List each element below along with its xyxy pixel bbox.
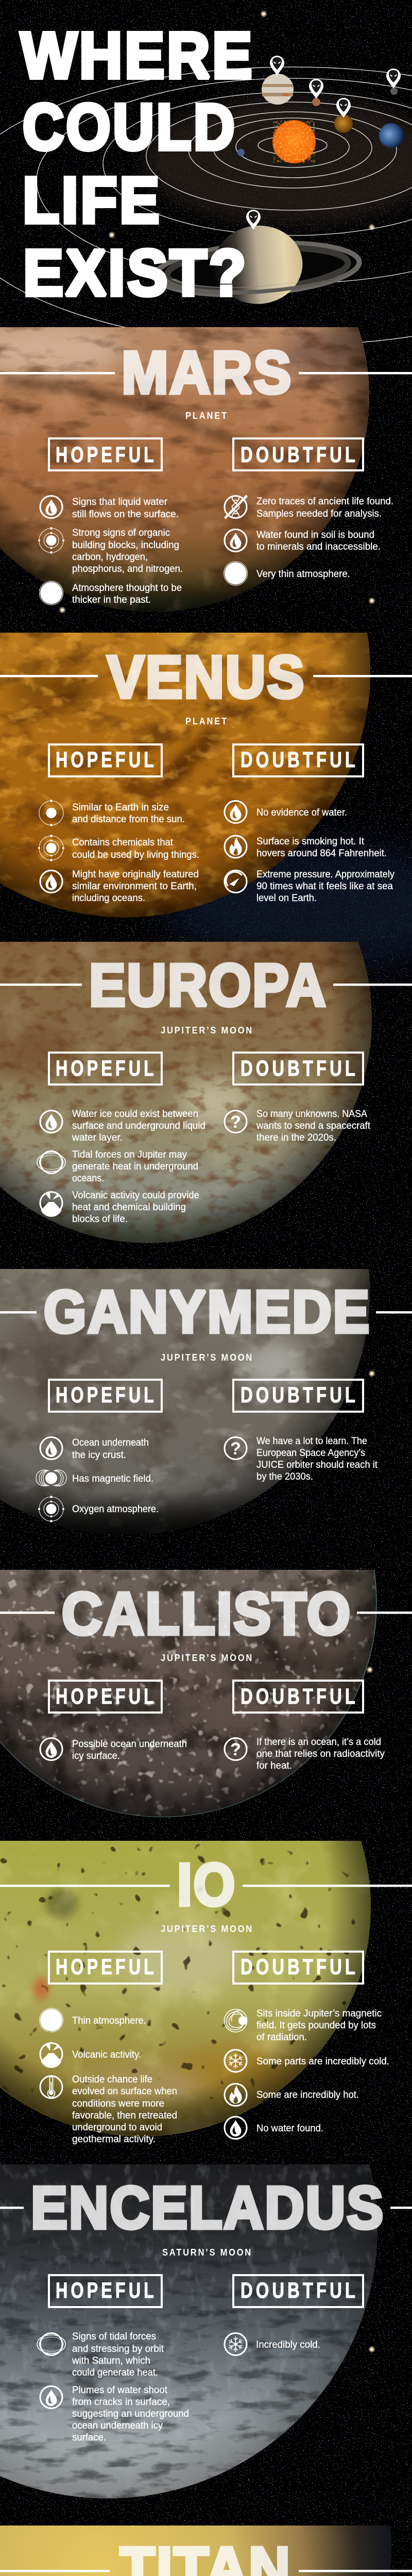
item: hot parts	[225, 2083, 359, 2106]
small rocky planet: mars	[312, 98, 320, 106]
label: type: JUPITER’S MOON	[161, 1352, 253, 1363]
venus	[334, 114, 353, 133]
item: water ice	[40, 1109, 205, 1143]
orbits	[0, 67, 412, 345]
item: outside chance: underground to avoid	[72, 2122, 162, 2133]
panel: Io	[0, 1677, 412, 2145]
item: water ice: Water ice could exist between	[72, 1109, 198, 1120]
item: incredibly cold	[225, 2333, 320, 2355]
label: type: PLANET	[185, 716, 228, 726]
heading rules	[0, 675, 412, 677]
hopeful box: HOPEFUL	[56, 1955, 157, 1979]
item: a lot to learn: by the 2030s.	[256, 1471, 313, 1482]
item: water in soil: Water found in soil is bound	[256, 530, 374, 540]
doubtful box	[233, 2275, 363, 2307]
panel: Titan	[0, 2526, 412, 2576]
item: unknowns: So many unknowns. NASA	[256, 1109, 367, 1120]
heading: ENCELADUS	[31, 2174, 385, 2241]
item: volcanic activity: Volcanic activity could provide	[72, 1190, 199, 1201]
item: a lot to learn	[225, 1436, 378, 1482]
doubtful box	[233, 1380, 363, 1412]
panel: Venus	[0, 633, 412, 917]
item: volcanic activity: blocks of life.	[72, 1214, 128, 1225]
heading rules	[0, 1311, 412, 1314]
doubtful box	[233, 744, 363, 776]
item: unknowns: there in the 2020s.	[256, 1132, 336, 1143]
doubtful box: DOUBTFUL	[241, 1056, 358, 1081]
item: possible ocean: icy surface.	[72, 1751, 120, 1761]
small moon	[390, 88, 398, 95]
hopeful box	[49, 744, 162, 776]
hopeful box: HOPEFUL	[56, 2278, 157, 2303]
doubtful box: DOUBTFUL	[241, 1955, 358, 1979]
item: no ancient life: Zero traces of ancient life found.	[256, 496, 393, 507]
item: a lot to learn: JUICE orbiter should reach it	[256, 1460, 378, 1470]
item: thin atmosphere	[224, 562, 350, 585]
heading rules	[0, 984, 412, 986]
item: organic building blocks: phosphorus, and nitrogen.	[72, 564, 183, 574]
item: cold ocean: one that relies on radioactivity	[256, 1749, 385, 1759]
item: unknowns: ?	[230, 1112, 241, 1132]
saturn	[150, 218, 364, 311]
planet: Titan atmosphere	[0, 2526, 397, 2576]
item: chemicals: could be used by living things.	[72, 850, 199, 860]
title: LIFE	[23, 164, 162, 236]
item: thin atmosphere: Very thin atmosphere.	[256, 569, 350, 580]
heading: CALLISTO	[62, 1580, 352, 1647]
label: type: JUPITER’S MOON	[161, 1924, 253, 1934]
location pins with alien heads	[246, 56, 401, 230]
item: water ice: surface and underground liquid	[72, 1121, 205, 1131]
item: cold parts: Some parts are incredibly cold.	[256, 2056, 389, 2067]
item: magnetic field	[36, 1470, 153, 1486]
hopeful box: HOPEFUL	[56, 1056, 157, 1081]
label: type: JUPITER’S MOON	[161, 1653, 253, 1663]
panel: Europa	[0, 942, 412, 1243]
item: liquid water: Signs that liquid water	[72, 497, 168, 507]
doubtful box: DOUBTFUL	[241, 1684, 358, 1709]
item: no ancient life: Samples needed for analysis.	[256, 509, 382, 519]
item: similar to Earth: Similar to Earth in size	[72, 802, 169, 813]
title: WHERE	[21, 19, 254, 92]
item: tidal forces: Signs of tidal forces	[72, 2331, 156, 2342]
item: atmosphere past: thicker in the past.	[72, 595, 151, 605]
item: outside chance: conditions were more	[72, 2098, 164, 2109]
item: extreme pressure: Extreme pressure. Approximately	[256, 869, 394, 880]
doubtful box	[233, 1053, 363, 1084]
heading: IO	[177, 1851, 236, 1918]
item: cold ocean: If there is an ocean, it’s a cold	[256, 1737, 381, 1748]
item: a lot to learn: We have a lot to learn. The	[256, 1436, 367, 1447]
item: no water: No evidence of water.	[256, 807, 347, 818]
heading: MARS	[122, 339, 293, 406]
item: chemicals	[38, 835, 199, 861]
item: extreme pressure: 90 times what it feels like at sea	[256, 881, 393, 892]
label: type: SATURN’S MOON	[162, 2247, 252, 2258]
item: tidal forces: generate heat in underground	[72, 1161, 198, 1172]
item: oceans	[40, 869, 199, 904]
item: chemicals: Contains chemicals that	[72, 837, 174, 848]
item: outside chance	[40, 2074, 177, 2145]
item: volcanic activity	[40, 1190, 199, 1225]
item: tidal forces	[37, 2331, 164, 2378]
item: outside chance: favorable, then retreated	[72, 2110, 177, 2121]
item: radiation: field. It gets pounded by lots	[256, 2020, 376, 2031]
item: no ancient life	[225, 496, 393, 519]
doubtful box: DOUBTFUL	[241, 443, 358, 467]
title	[21, 19, 254, 309]
item: thin atmosphere: Thin atmosphere.	[72, 2015, 146, 2026]
item: cold ocean: for heat.	[256, 1760, 292, 1771]
item: radiation: Sits inside Jupiter’s magnetic	[256, 2008, 382, 2019]
jupiter	[262, 74, 294, 105]
heading: GANYMEDE	[44, 1278, 371, 1345]
doubtful box	[233, 1681, 363, 1713]
item: atmosphere past: Atmosphere thought to be	[72, 583, 182, 594]
item: plumes: from cracks in surface,	[72, 2397, 170, 2408]
heading rules	[0, 372, 412, 374]
item: similar to Earth: and distance from the sun.	[72, 814, 185, 825]
item: hot surface: Surface is smoking hot. It	[256, 836, 365, 847]
item: plumes: surface.	[72, 2432, 106, 2443]
item: outside chance: evolved on surface when	[72, 2086, 177, 2097]
sun	[272, 120, 316, 163]
item: ocean	[40, 1437, 149, 1461]
doubtful box	[233, 438, 363, 470]
panel: Mars	[0, 327, 412, 612]
item: tidal forces: Tidal forces on Jupiter may	[72, 1149, 187, 1160]
item: organic building blocks: carbon, hydrogen,	[72, 552, 148, 563]
item: organic building blocks: building blocks, including	[72, 540, 179, 551]
item: a lot to learn: European Space Agency’s	[256, 1448, 365, 1459]
item: atmosphere past	[39, 581, 182, 605]
heading rules	[0, 1612, 412, 1614]
item: outside chance: Outside chance life	[72, 2074, 152, 2085]
hopeful box	[49, 2275, 162, 2307]
item: tidal forces: oceans.	[72, 1173, 104, 1184]
planet: Venus surface	[0, 633, 370, 917]
item: tidal forces: and stressing by orbit	[72, 2344, 164, 2354]
item: a lot to learn: ?	[230, 1439, 241, 1459]
item: organic building blocks: Strong signs of organic	[72, 528, 170, 538]
doubtful box: DOUBTFUL	[241, 1383, 358, 1408]
label: type: PLANET	[185, 411, 228, 421]
item: organic building blocks	[38, 527, 183, 574]
item: ocean: Ocean underneath	[72, 1437, 149, 1448]
item: ocean: the icy crust.	[72, 1450, 126, 1461]
heading rules	[0, 2207, 412, 2209]
doubtful box	[233, 1952, 363, 1984]
item: unknowns	[225, 1109, 371, 1143]
item: extreme pressure: level on Earth.	[256, 893, 317, 904]
heading: EUROPA	[89, 952, 327, 1019]
panel: Enceladus	[0, 1959, 412, 2504]
item: cold ocean	[225, 1737, 385, 1771]
item: radiation: of radiation.	[256, 2032, 307, 2043]
hopeful box	[49, 1053, 162, 1084]
hopeful box: HOPEFUL	[56, 443, 157, 467]
item: plumes	[40, 2385, 189, 2443]
item: hot parts: Some are incredibly hot.	[256, 2090, 359, 2100]
hopeful box	[49, 1380, 162, 1412]
item: oceans: Might have originally featured	[72, 869, 199, 880]
title: COULD	[23, 91, 237, 163]
planet: Io surface	[0, 1677, 376, 2140]
item: plumes: ocean underneath icy	[72, 2420, 163, 2431]
doubtful box: DOUBTFUL	[241, 2278, 358, 2303]
item: water in soil: to minerals and inaccessible.	[256, 541, 381, 552]
hopeful box: HOPEFUL	[56, 748, 157, 772]
planet: Europa surface	[0, 942, 372, 1243]
hero panel: solar system	[0, 19, 412, 345]
item: liquid water	[40, 496, 179, 520]
item: magnetic field: Has magnetic field.	[72, 1473, 153, 1484]
planet: Mars surface	[0, 327, 369, 612]
hopeful box	[49, 1681, 162, 1713]
hopeful box	[49, 438, 162, 470]
item: radiation	[225, 2008, 382, 2043]
item: tidal forces: could generate heat.	[72, 2367, 158, 2378]
planet: Ganymede surface	[0, 1269, 370, 1535]
item: cold ocean: ?	[230, 1740, 241, 1759]
item: no water	[225, 801, 347, 823]
item: oceans: including oceans.	[72, 893, 145, 904]
title: EXIST?	[23, 236, 248, 309]
item: volcanic activity	[40, 2043, 141, 2068]
item: water in soil	[225, 530, 381, 552]
item: unknowns: wants to send a spacecraft	[256, 1121, 371, 1131]
item: possible ocean: Possible ocean underneath	[72, 1739, 187, 1750]
heading rules	[0, 1885, 412, 1887]
item: water ice: water layer.	[72, 1132, 123, 1143]
doubtful box: DOUBTFUL	[241, 748, 358, 772]
item: oxygen	[38, 1496, 159, 1522]
hopeful box: HOPEFUL	[56, 1684, 157, 1709]
hopeful box	[49, 1952, 162, 1984]
item: similar to Earth	[39, 800, 185, 826]
item: extreme pressure	[225, 869, 394, 904]
heading rules	[0, 2570, 412, 2572]
item: thin atmosphere	[39, 2008, 146, 2032]
item: plumes: suggesting an underground	[72, 2409, 189, 2419]
item: possible ocean	[40, 1738, 187, 1761]
planet: Enceladus surface	[0, 1959, 386, 2504]
item: outside chance: geothermal activity.	[72, 2134, 156, 2145]
panel: Callisto	[0, 1570, 412, 1818]
heading: VENUS	[107, 643, 305, 710]
panel: Ganymede	[0, 1269, 412, 1535]
hopeful box: HOPEFUL	[56, 1383, 157, 1408]
item: tidal forces: with Saturn, which	[72, 2355, 150, 2366]
earth	[379, 123, 404, 148]
item: no water	[225, 2116, 323, 2139]
planet: Callisto surface	[0, 1389, 386, 1822]
item: incredibly cold: Incredibly cold.	[256, 2340, 320, 2350]
item: volcanic activity: heat and chemical building	[72, 1202, 186, 1213]
item: oceans: similar environment to Earth,	[72, 881, 197, 892]
item: volcanic activity: Volcanic activity.	[72, 2049, 141, 2060]
item: liquid water: still flows on the surface.	[72, 509, 179, 520]
small blue planet	[237, 149, 245, 156]
item: hot surface	[225, 836, 387, 859]
item: hot surface: hovers around 864 Fahrenheit.	[256, 848, 387, 859]
item: tidal forces	[37, 1149, 198, 1184]
item: cold parts	[225, 2049, 389, 2072]
item: no water: No water found.	[256, 2123, 323, 2134]
item: plumes: Plumes of water shoot	[72, 2385, 168, 2396]
label: type: JUPITER’S MOON	[161, 1025, 253, 1036]
item: oxygen: Oxygen atmosphere.	[72, 1504, 159, 1515]
